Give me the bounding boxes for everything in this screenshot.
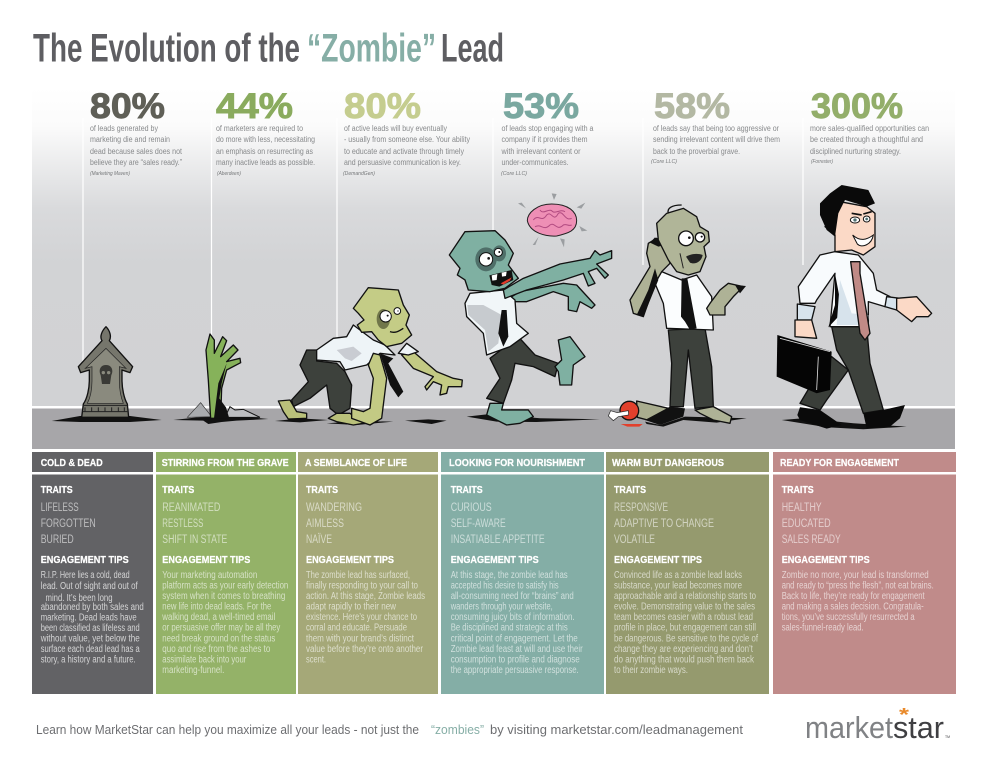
shirt (317, 325, 395, 370)
header (773, 452, 956, 472)
panel: cold and dead: story, a history and a future. (41, 654, 136, 666)
foot (695, 407, 732, 423)
back shoe (797, 407, 842, 429)
far arm (402, 352, 462, 395)
panel: ready for engagement (773, 452, 956, 694)
panel: warm but dangerous: TRAITS (614, 485, 646, 496)
panel: a semblance of life: ENGAGEMENT TIPS (306, 555, 394, 566)
head (449, 231, 518, 292)
panel: warm but dangerous (606, 452, 769, 694)
panel: warm but dangerous: ADAPTIVE TO CHANGE (614, 518, 714, 530)
icon: hand rising from the grave (173, 334, 268, 424)
panel: stirring from the grave (156, 452, 296, 694)
stat: 80% of active leads: and persuasive communication is key. (344, 158, 461, 167)
neck and face (825, 202, 875, 255)
panel: warm but dangerous: VOLATILE (614, 534, 655, 546)
right arm and phone (707, 283, 743, 315)
header (441, 452, 604, 472)
title: “Zombie” (307, 26, 436, 70)
panel: cold and dead: mind. It’s been long (46, 593, 112, 604)
stat: 80% of active leads (343, 87, 470, 177)
panel: stirring from the grave: marketing-funnel. (162, 665, 224, 676)
stat: 53% stop engaging: with irrelevant content or (501, 147, 581, 156)
tie (681, 278, 697, 330)
stat: 58% say too aggressive: of leads say that being too aggressive or (653, 124, 779, 133)
trousers (487, 337, 558, 403)
stat: 58% say too aggressive: sending irrelevant content will drive them (653, 135, 780, 144)
stat: 58% say too aggressive (651, 87, 780, 165)
panel: looking for nourishment: consuming juicy bits of information. (451, 612, 575, 623)
panel: a semblance of life (298, 452, 438, 694)
back foot (278, 400, 307, 419)
panel: a semblance of life: corral and educate. Persuade (306, 623, 407, 634)
tie (380, 353, 403, 397)
panel: cold and dead: COLD & DEAD (41, 458, 103, 469)
stat: 44% of marketers (216, 87, 315, 177)
panel: looking for nourishment: all-consuming need for “brains” and (451, 591, 574, 602)
panel: stirring from the grave: Your marketing automation (162, 570, 257, 581)
panel: a semblance of life: scent. (306, 654, 326, 665)
panel: looking for nourishment: TRAITS (451, 485, 483, 496)
panel: stirring from the grave: or persuasive offer may be all they (162, 623, 280, 634)
head (657, 208, 709, 275)
panel: a semblance of life: AIMLESS (306, 518, 344, 530)
stat: 44% of marketers: of marketers are required to (216, 124, 303, 133)
panel: looking for nourishment (441, 452, 604, 694)
stat: 300% more opportunities (810, 87, 929, 165)
panel: ready for engagement: READY FOR ENGAGEMENT (780, 458, 899, 469)
stat: 44% of marketers: many inactive leads as possible. (216, 158, 315, 167)
panel: cold and dead: ENGAGEMENT TIPS (41, 555, 129, 566)
stat: 300% more opportunities: (Forrester) (811, 159, 833, 165)
trousers (668, 328, 713, 408)
panel: stirring from the grave: REANIMATED (162, 502, 220, 514)
panel: a semblance of life: TRAITS (306, 485, 338, 496)
panel: warm but dangerous: profile in place, but engagement can still (614, 623, 756, 634)
stat: 53% stop engaging: company if it provides them (502, 135, 588, 144)
icon: skull (100, 365, 112, 384)
panel: warm but dangerous: RESPONSIVE (614, 502, 668, 514)
panel: cold and dead: been classified as lifeless and (41, 623, 140, 634)
near arm (352, 353, 387, 425)
panel: stirring from the grave: quo and rise from the ashes to (162, 644, 271, 655)
panel: ready for engagement: and making a sales decision. Congratula- (782, 602, 924, 613)
stat: 80% of leads die: 80% (90, 87, 165, 126)
panel: looking for nourishment: At this stage, the zombie lead has (451, 570, 568, 581)
illustration: grey zombie on phone (630, 205, 747, 427)
panel: warm but dangerous: substance, your lead becomes more (614, 580, 742, 592)
panel: ready for engagement: and ready to “press the flesh”, not eat brains. (782, 580, 934, 592)
phone arm (630, 238, 670, 317)
panel: looking for nourishment: consumption to profile and diagnose (451, 654, 580, 665)
panel: stirring from the grave: assimilate back into your (162, 654, 247, 665)
illustration: brain (518, 193, 587, 247)
stat: 53% stop engaging: 53% (503, 87, 579, 126)
header (156, 452, 296, 472)
stat: 53% stop engaging: of leads stop engaging with a (502, 124, 594, 133)
raised foot (555, 337, 585, 385)
panel: evolution scene backdrop (32, 88, 955, 449)
panel: ready for engagement: sales-funnel-ready lead. (782, 623, 864, 634)
panel: looking for nourishment: the appropriate persuasive response. (451, 665, 579, 676)
panel: cold and dead: surface each dead lead has a (41, 644, 140, 655)
back trouser leg (800, 357, 848, 410)
panel: a semblance of life: adapt rapidly to their new (306, 602, 397, 613)
stat: 80% of leads die: marketing die and remain (90, 135, 170, 144)
panel: stirring from the grave: TRAITS (162, 485, 195, 496)
stat: 44% of marketers: do more with less, necessitating (216, 135, 315, 144)
illustration: teal zombie reaching for brains (449, 231, 612, 425)
header (606, 452, 769, 472)
panel: a semblance of life: WANDERING (306, 502, 362, 514)
panel: ready for engagement: tions, you’ve successfully resurrected a (782, 612, 915, 623)
panel: looking for nourishment: wanders through your website, (450, 602, 553, 613)
panel: stirring from the grave: RESTLESS (162, 518, 204, 530)
pointing hand (897, 297, 932, 322)
front foot (328, 413, 363, 425)
panel: ready for engagement: HEALTHY (782, 502, 822, 514)
stat: 80% of leads die: of leads generated by (90, 124, 158, 133)
panel: looking for nourishment: LOOKING FOR NOURISHMENT (449, 458, 585, 469)
front shoe (863, 405, 905, 428)
footer call to action: Learn how MarketStar can help you maximize all your leads - not just the (36, 722, 419, 737)
panel: warm but dangerous: evolve. Demonstrating value to the sales (614, 602, 755, 613)
panel: cold and dead: abandoned by both sales and (41, 602, 144, 613)
footer call to action: by visiting marketstar.com/leadmanagement (490, 722, 743, 737)
logo: marketstar: TM (945, 734, 950, 739)
stat: 80% of active leads: of active leads will buy eventually (344, 124, 447, 133)
stat: 44% of marketers: (Aberdeen) (217, 171, 241, 177)
panel: stirring from the grave: system when it comes to breathing (162, 591, 285, 602)
panel: warm but dangerous: to their zombie ways. (614, 665, 688, 676)
panel: warm but dangerous: team becomes easier with a robust lead (614, 612, 753, 623)
stat: 300% more opportunities: more sales-qualified opportunities can (810, 124, 929, 133)
panel: a semblance of life: them with your brand’s distinct (306, 633, 414, 644)
panel: warm but dangerous: WARM BUT DANGEROUS (612, 458, 724, 469)
panel: cold and dead: lead. Out of sight and out of (41, 581, 138, 592)
stat: 80% of active leads: (DemandGen) (343, 171, 375, 177)
logo: marketstar: * (899, 705, 909, 725)
panel: a semblance of life: action. At this stage, Zombie leads (306, 591, 425, 602)
panel: warm but dangerous: ENGAGEMENT TIPS (614, 555, 702, 566)
panel: looking for nourishment: Zombie lead feast at will and use their (451, 644, 583, 655)
briefcase (777, 335, 832, 393)
front trouser leg (832, 327, 883, 413)
head (353, 288, 412, 347)
illustration: severed leg with bone (608, 401, 668, 427)
panel: looking for nourishment: critical point of engagement. Let the (451, 633, 578, 644)
stat: 80% of leads die (90, 87, 183, 177)
panel: ready for engagement: ENGAGEMENT TIPS (782, 555, 870, 566)
header (298, 452, 438, 472)
panel: looking for nourishment: SELF-AWARE (451, 518, 506, 530)
stat: 53% stop engaging: under-communicates. (502, 158, 568, 167)
panel: looking for nourishment: ENGAGEMENT TIPS (451, 555, 539, 566)
standing foot (487, 403, 533, 425)
stat: 80% of leads die: (Marketing Maven) (90, 171, 130, 177)
logo: marketstar: star (893, 710, 944, 745)
stat: 53% stop engaging (501, 87, 594, 177)
panel: ready for engagement: Zombie no more, your lead is transformed (782, 570, 929, 581)
panel: looking for nourishment: accepted his desire to satisfy his (451, 580, 559, 592)
panel: stirring from the grave: STIRRING FROM THE GRAVE (162, 458, 289, 469)
stat: 300% more opportunities: disciplined nurturing strategy. (810, 147, 901, 156)
panel: looking for nourishment: CURIOUS (451, 502, 492, 514)
panel: cold and dead: marketing. Dead leads have (41, 612, 137, 624)
panel: stirring from the grave: platform acts as your early detection (162, 580, 288, 592)
panel: a semblance of life: finally responding to your call to (306, 580, 418, 592)
tie (851, 262, 870, 340)
panel: cold and dead (32, 452, 153, 694)
panel: warm but dangerous: approachable and a relationship starts to (614, 591, 756, 602)
stat: 58% say too aggressive: (Core LLC) (651, 159, 677, 165)
panel: warm but dangerous: change they are experiencing and don’t (614, 644, 753, 655)
panel: stirring from the grave: SHIFT IN STATE (162, 534, 228, 546)
stat: 44% of marketers: 44% (216, 87, 293, 126)
hair (820, 185, 875, 237)
panel: stirring from the grave: walking dead, a well-timed email (162, 612, 275, 623)
stat: 80% of active leads: - usually from someone else. Your ability (344, 135, 470, 144)
illustration: crawling olive zombie (275, 288, 462, 425)
panel: ready for engagement: Back to life, they’re ready for engagement (782, 591, 925, 602)
stat: 44% of marketers: an emphasis on resurrecting as (216, 147, 313, 156)
stat: 58% say too aggressive: back to the proverbial grave. (653, 147, 740, 156)
panel: a semblance of life: NAÏVE (306, 534, 332, 546)
stat: 58% say too aggressive: 58% (654, 87, 730, 126)
panel: ready for engagement: SALES READY (782, 534, 841, 546)
stat: 80% of leads die: dead because sales does not (90, 147, 183, 156)
stat: 300% more opportunities: 300% (811, 87, 903, 126)
logo: marketstar (805, 705, 950, 745)
panel: cold and dead: R.I.P. Here lies a cold, dead (41, 570, 130, 581)
stat: 80% of active leads: to educate and activate through timely (344, 147, 464, 156)
panel: warm but dangerous: be dangerous. Be sensitive to the cycle of (614, 633, 758, 644)
stat: 300% more opportunities: be created through a thoughtful and (810, 135, 923, 144)
panel: a semblance of life: existence. Here’s your chance to (306, 612, 417, 623)
panel: looking for nourishment: Be disciplined and strategic at this (451, 623, 568, 634)
footer call to action (36, 722, 743, 737)
stat: 80% of active leads: 80% (344, 87, 421, 126)
illustration: healthy businessman with briefcase (777, 185, 932, 429)
stat: 53% stop engaging: (Core LLC) (501, 171, 527, 177)
panel: ready for engagement: TRAITS (782, 485, 814, 496)
panel: ready for engagement: EDUCATED (782, 518, 831, 530)
title: Lead (441, 26, 504, 70)
title: The Evolution of the (33, 26, 300, 70)
trousers (292, 350, 352, 415)
shirt (798, 252, 890, 327)
panel: a semblance of life: value before they’re onto another (306, 644, 424, 655)
header (32, 452, 153, 472)
panel: cold and dead: BURIED (41, 534, 74, 546)
panel: warm but dangerous: do anything that would push them back (614, 654, 755, 665)
panel: warm but dangerous: Convinced life as a zombie lead lacks (614, 570, 742, 581)
icon: tombstone (52, 327, 162, 422)
shirt (465, 290, 528, 355)
panel: cold and dead: FORGOTTEN (41, 518, 96, 530)
footer call to action: “zombies” (431, 722, 484, 737)
stat: 80% of leads die: believe they are “sales ready.” (90, 158, 182, 167)
panel: stirring from the grave: ENGAGEMENT TIPS (162, 555, 251, 566)
left hand (795, 320, 817, 338)
panel: cold and dead: LIFELESS (41, 502, 79, 514)
panel: a semblance of life: A SEMBLANCE OF LIFE (305, 458, 407, 469)
panel: looking for nourishment: INSATIABLE APPETITE (451, 534, 545, 546)
panel: stirring from the grave: new life into dead leads. For the (162, 602, 272, 613)
panel: a semblance of life: The zombie lead has surfaced, (306, 570, 410, 581)
logo: marketstar: market (805, 710, 893, 745)
panel: cold and dead: without value, yet below the (40, 634, 140, 644)
cuffs (797, 304, 815, 320)
upper arm (503, 251, 612, 298)
shirt (655, 272, 713, 330)
lower arm (503, 283, 595, 312)
panel: cold and dead: TRAITS (41, 485, 73, 496)
panel: stirring from the grave: need break ground on the status (162, 633, 275, 644)
